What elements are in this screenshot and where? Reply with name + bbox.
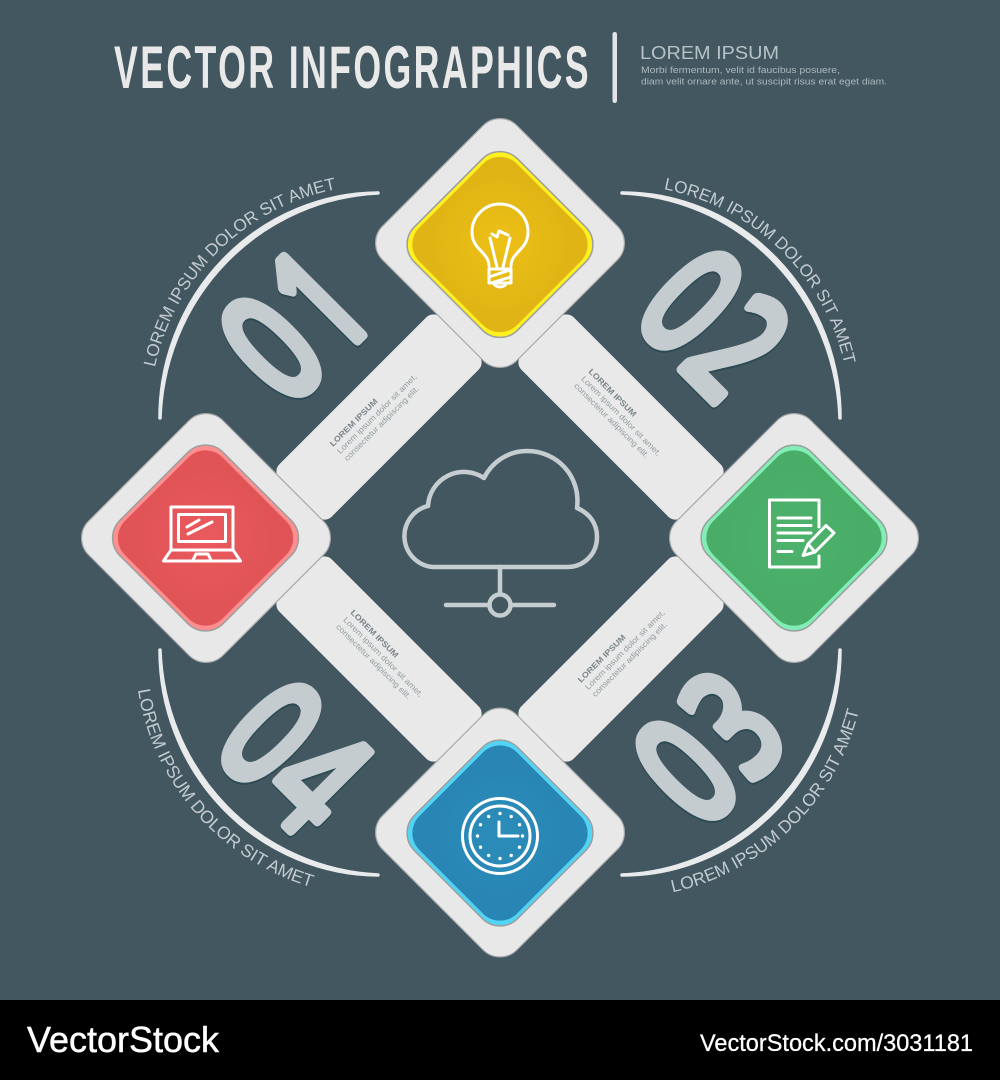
panel: bottom-left text bar xyxy=(272,552,486,766)
panel: top-right text bar: Lorem ipsum dolor sit amet, xyxy=(579,374,663,458)
arc 02 with caption: LOREM IPSUM DOLOR SIT AMET xyxy=(665,178,856,362)
title: VECTOR INFOGRAPHICS xyxy=(114,34,591,101)
arc 03 with caption xyxy=(620,648,858,892)
header text block: Morbi fermentum, velit id faucibus posuere, xyxy=(641,65,840,76)
panel: top-left text bar: consectetur adipiscing elit. xyxy=(342,384,421,463)
arc 04 with caption: LOREM IPSUM DOLOR SIT AMET xyxy=(138,689,314,886)
panel: top-left text bar xyxy=(272,310,486,524)
panel: bottom-left text bar: LOREM IPSUM xyxy=(349,608,400,660)
header text block: diam velit ornare ante, ut suscipit risus erat eget diam. xyxy=(641,76,887,88)
panel: bottom-left text bar: Lorem ipsum dolor sit amet, xyxy=(341,615,425,699)
panel: top-right text bar xyxy=(514,310,728,524)
panel: left red tile xyxy=(72,404,340,672)
panel: top-left text bar: Lorem ipsum dolor sit amet, xyxy=(335,372,419,456)
panel: top-right text bar: LOREM IPSUM xyxy=(587,367,638,419)
icon: light bulb xyxy=(472,204,528,287)
arc 01 with caption: LOREM IPSUM DOLOR SIT AMET xyxy=(144,178,334,366)
number 01: 01 xyxy=(198,227,399,428)
panel: right green tile xyxy=(660,404,928,672)
number 02: 02 xyxy=(611,227,812,428)
panel: top-left text bar: LOREM IPSUM xyxy=(328,397,380,448)
footer image id: VectorStock.com/3031181 xyxy=(700,1030,973,1057)
footer band xyxy=(0,1000,1000,1080)
panel: bottom-right text bar xyxy=(514,552,728,766)
panel: bottom-right text bar: Lorem ipsum dolor sit amet, xyxy=(583,608,667,692)
header text block: LOREM IPSUM xyxy=(640,43,779,63)
icon: document with pencil xyxy=(770,500,834,567)
panel: bottom-right text bar: consectetur adipiscing elit. xyxy=(590,620,669,699)
arc 02 with caption xyxy=(620,178,856,420)
panel: bottom-left text bar: consectetur adipiscing elit. xyxy=(334,622,413,701)
arc 01 with caption xyxy=(144,178,380,420)
number 04: 04 xyxy=(191,659,392,860)
footer logo: VectorStock xyxy=(27,1019,220,1060)
arc 03 with caption: LOREM IPSUM DOLOR SIT AMET xyxy=(671,708,858,892)
panel: top-right text bar: consectetur adipiscing elit. xyxy=(572,381,651,460)
panel: bottom-right text bar: LOREM IPSUM xyxy=(576,633,628,684)
header text block xyxy=(640,43,887,88)
panel: bottom blue tile xyxy=(366,698,634,967)
icon: cloud network xyxy=(404,451,597,616)
icon: clock xyxy=(462,798,538,874)
arc 04 with caption xyxy=(138,648,380,886)
icon: laptop xyxy=(164,507,240,561)
header divider xyxy=(612,32,617,103)
number 03: 03 xyxy=(612,650,813,851)
panel: top yellow tile xyxy=(366,109,634,377)
